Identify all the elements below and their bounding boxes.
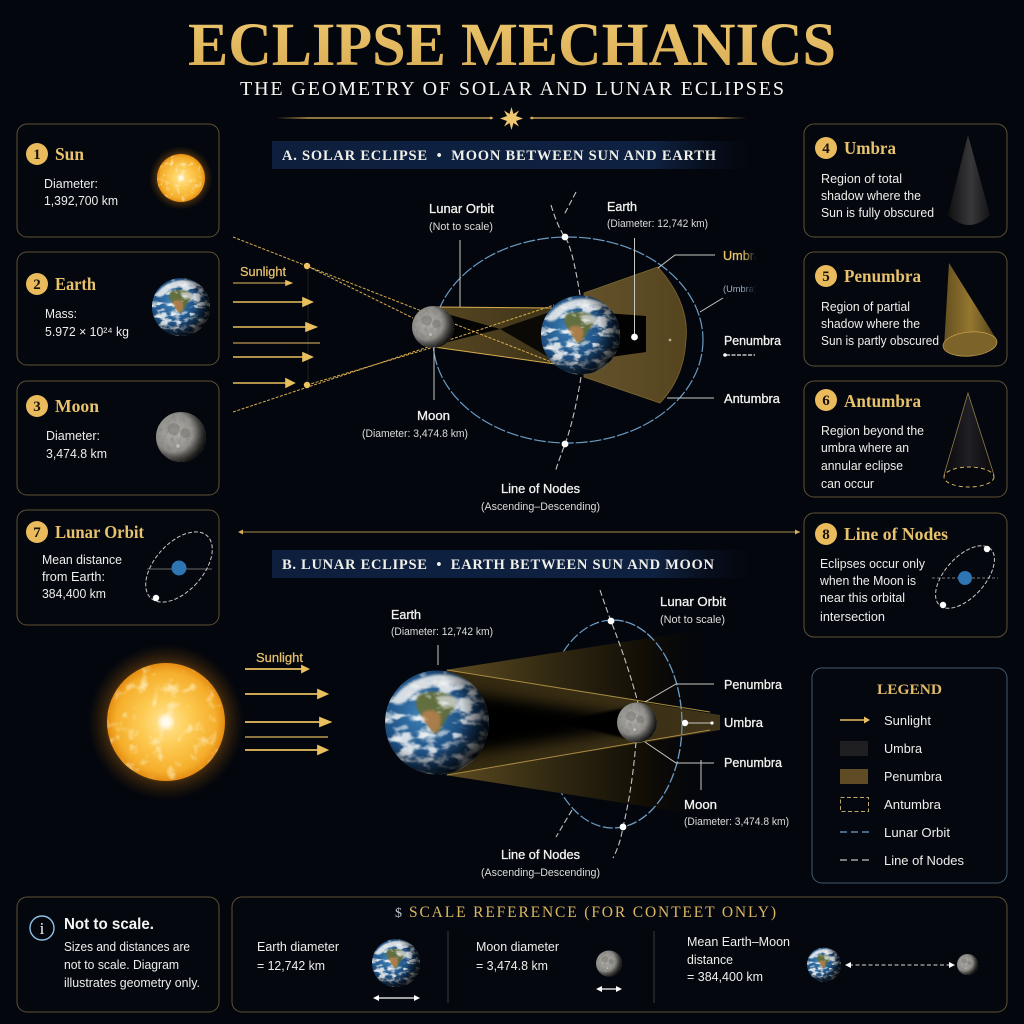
panel: lunar orbit [17,510,225,625]
legend: penumbra [840,769,943,784]
badge 5: 5 [822,269,830,285]
label: moon B: Moon [684,797,717,812]
penumbra text: shadow where the [821,316,920,331]
scale: earth moon distance: Mean Earth–Moon [687,934,790,949]
heading: moon: Moon [55,396,99,416]
earth [385,670,489,774]
inner shadow cone [447,670,720,775]
sun rays [233,237,555,412]
badge 5 [815,265,837,287]
scale heading: SCALE REFERENCE (FOR CONTEET ONLY) [409,904,776,921]
leader lines [438,645,714,790]
lunar orbit text: from Earth: [42,569,105,584]
legend: sunlight [840,713,931,728]
earth mass text: 5.972 × 10²⁴ kg [45,324,129,339]
heading: lunar orbit: Lunar Orbit [55,522,144,542]
heading: line of nodes: Line of Nodes [844,524,948,544]
earth mass text: Mass: [45,306,77,321]
label: lunar orbit A: (Not to scale) [429,221,493,233]
heading: antumbra: Antumbra [844,391,921,411]
scale: earth diameter: Earth diameter [257,939,340,954]
diagram: solar eclipse [233,192,723,470]
badge 7: 7 [33,525,41,541]
label: sunlight A: Sunlight [240,265,287,279]
icon: orbit [133,520,225,614]
label: lunar orbit B: (Not to scale) [660,614,725,626]
scale: earth moon distance: = 384,400 km [687,969,763,984]
line of nodes text: when the Moon is [819,573,916,588]
lunar orbit text: Mean distance [42,552,122,567]
legend: line of nodes [840,853,964,868]
penumbra text [821,299,939,348]
line of nodes text: Eclipses occur only [820,556,925,571]
panel: note [17,897,219,1012]
note text: illustrates geometry only. [64,975,200,990]
label: sunlight B: Sunlight [256,651,304,665]
label: earth A [607,199,708,230]
diagram: lunar eclipse [88,590,720,858]
legend: line of nodes: Line of Nodes [884,853,964,868]
line of nodes [556,590,638,858]
section heading A [272,141,752,169]
section heading A: A. SOLAR ECLIPSE • MOON BETWEEN SUN AND EARTH [282,148,717,164]
section heading B: B. LUNAR ECLIPSE • EARTH BETWEEN SUN AND MOON [282,557,715,573]
panel: earth [17,252,219,365]
label: line of nodes A [481,481,600,513]
icon: penumbra cone [942,263,998,358]
scale: earth diameter: = 12,742 km [257,958,325,973]
scale: earth moon distance [687,934,978,984]
heading: penumbra: Penumbra [844,266,921,286]
icon: sun [149,146,213,210]
line of nodes text [819,556,925,624]
legend: antumbra [840,797,942,812]
legend: lunar orbit [840,825,950,840]
label: earth B: (Diameter: 12,742 km) [391,626,493,638]
section heading B [272,550,752,578]
note text [64,939,200,990]
line of nodes [551,192,581,470]
label: penumbra A: Penumbra [724,333,782,348]
antumbra text: Region beyond the [821,423,924,438]
badge 1: 1 [33,147,41,163]
icon: antumbra cone [944,393,994,487]
heading: umbra: Umbra [844,138,896,158]
legend: umbra: Umbra [884,741,923,756]
scale: earth diameter [257,939,420,1001]
badge 2: 2 [33,277,41,293]
earth [541,296,620,374]
badge 2 [26,273,48,295]
scale: moon diameter [476,939,622,992]
legend: sunlight: Sunlight [884,713,931,728]
line of nodes text: intersection [820,609,885,624]
umbra text: shadow where the [821,188,921,203]
umbra behind earth [590,312,646,360]
label: moon A [362,408,468,440]
lunar orbit left arc [544,620,682,828]
lunar orbit [433,237,703,443]
label: umbra A: (Umbra) [723,284,757,294]
label: line of nodes A: (Ascending–Descending) [481,501,600,513]
label: line of nodes A: Line of Nodes [501,481,580,496]
panel: antumbra [804,381,1007,497]
icon: earth [152,278,210,336]
umbra wedge between moon and earth [440,312,500,344]
legend: antumbra: Antumbra [884,797,942,812]
badge 8 [815,523,837,545]
umbra text: Sun is fully obscured [821,205,934,220]
scale: moon diameter: Moon diameter [476,939,560,954]
panel: sun [17,124,219,237]
line of nodes text: near this orbital [820,590,905,605]
moon [412,306,454,348]
legend heading: LEGEND [877,682,942,698]
panel: line of nodes [804,513,1007,637]
label: penumbra A [723,333,782,357]
penumbra text: Region of partial [821,299,910,314]
label: earth A: (Diameter: 12,742 km) [607,218,708,230]
moon diameter text [46,428,107,461]
penumbra band bottom [445,730,700,815]
badge 8: 8 [822,527,830,543]
title: ECLIPSE MECHANICS [188,12,836,79]
antumbra text: umbra where an [821,440,909,455]
scale: earth moon distance: distance [687,952,733,967]
section divider [238,530,800,534]
panel: scale reference [232,897,1007,1012]
umbra text: Region of total [821,171,902,186]
panel: penumbra [804,252,1007,366]
heading: sun: Sun [55,144,84,164]
label: lunar orbit A: Lunar Orbit [429,201,494,216]
moon diameter text: 3,474.8 km [46,446,107,461]
badge 3: 3 [33,399,41,415]
penumbra band top [445,630,700,712]
label: umbra A [723,244,766,300]
cone moon to earth [434,307,555,364]
scale: moon diameter: = 3,474.8 km [476,958,548,973]
label: earth B [391,607,493,638]
label: moon A: Moon [417,408,450,423]
soft dark core [455,690,640,756]
badge 6 [815,389,837,411]
subtitle: THE GEOMETRY OF SOLAR AND LUNAR ECLIPSES [240,78,784,100]
penumbra text: Sun is partly obscured [821,333,939,348]
sun diameter text: 1,392,700 km [44,193,118,208]
badge 1 [26,143,48,165]
lunar orbit right arc [613,620,682,828]
label: line of nodes B: (Ascending–Descending) [481,867,600,879]
star divider [276,107,747,130]
label: lunar orbit B [660,594,726,626]
label: lunar orbit B: Lunar Orbit [660,594,726,609]
note heading: Not to scale. [64,916,154,933]
badge 4 [815,137,837,159]
panel: umbra [804,124,1007,237]
ray dots [304,263,310,388]
icon: nodes [925,535,1005,619]
label: earth A: Earth [607,199,637,214]
icon: info [30,916,54,940]
label: antumbra A: Antumbra [724,391,781,406]
label: moon B: (Diameter: 3,474.8 km) [684,816,789,828]
label: penumbra B bottom: Penumbra [724,755,783,770]
lunar orbit text [42,552,122,601]
label: moon A: (Diameter: 3,474.8 km) [362,428,468,440]
antumbra text [821,423,924,491]
large sun [88,644,244,800]
node dots [608,618,714,830]
label: line of nodes B [481,847,600,879]
label: moon B [684,797,789,828]
legend: penumbra: Penumbra [884,769,943,784]
badge 4: 4 [822,141,830,157]
panel: legend [812,668,1007,883]
note text: not to scale. Diagram [64,957,179,972]
label: umbra B: Umbra [724,715,764,730]
icon: info: i [40,919,45,938]
icon: umbra cone [948,135,990,225]
moon [617,702,657,742]
earth mass text [45,306,129,339]
label: penumbra B top: Penumbra [724,677,783,692]
legend: lunar orbit: Lunar Orbit [884,825,950,840]
penumbra fan behind earth [584,267,686,403]
badge 3 [26,395,48,417]
label: lunar orbit A [429,201,494,233]
node dots [562,234,671,447]
sunlight arrows [245,666,330,754]
umbra text [821,171,934,220]
scale heading: $ [395,906,402,921]
antumbra text: can occur [821,476,875,491]
heading: earth: Earth [55,274,96,294]
label: umbra A: Umbra [723,248,762,263]
moon diameter text: Diameter: [46,428,100,443]
antumbra text: annular eclipse [821,458,903,473]
note text: Sizes and distances are [64,939,190,954]
legend: umbra [840,741,923,756]
shadow edge lines [447,670,710,775]
badge 6: 6 [822,393,830,409]
leader lines [434,238,723,400]
label: earth B: Earth [391,607,421,622]
sun diameter text [44,176,118,208]
sun diameter text: Diameter: [44,176,98,191]
icon: moon [156,412,206,462]
lunar orbit text: 384,400 km [42,586,106,601]
sunlight arrows [233,281,320,387]
umbra wedge before moon [560,706,632,740]
panel: moon [17,381,219,495]
label: line of nodes B: Line of Nodes [501,847,580,862]
badge 7 [26,521,48,543]
